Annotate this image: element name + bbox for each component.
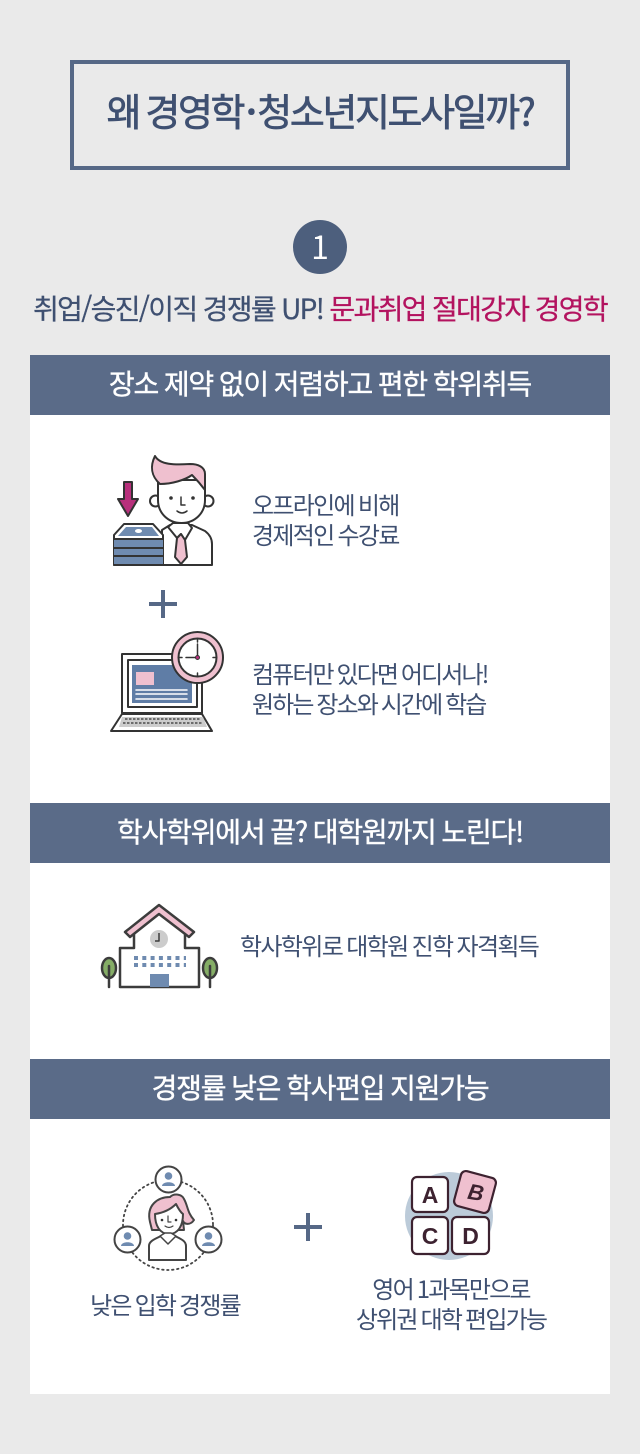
panel: white content: [30, 355, 610, 1394]
icon: ABCD blocks: C: [422, 1223, 438, 1249]
icon: competition circle: [114, 1166, 222, 1270]
text: study anywhere: [252, 655, 487, 720]
number badge: 1: [311, 223, 329, 269]
heading: section 3: 경쟁률 낮은 학사편입 지원가능: [152, 1067, 488, 1107]
text: affordable tuition: [252, 486, 400, 551]
heading: section 2: [30, 803, 610, 863]
heading: section 3: [30, 1059, 610, 1119]
icon: plus 1: [149, 590, 177, 618]
text: affordable tuition: 경제적인 수강료: [252, 516, 399, 551]
text: affordable tuition: 오프라인에 비해: [252, 486, 399, 521]
text: study anywhere: 컴퓨터만 있다면 어디서나!: [252, 655, 487, 690]
icon: laptop with clock: [111, 632, 223, 731]
title box: [70, 60, 570, 170]
number badge: [293, 220, 347, 274]
text: study anywhere: 원하는 장소와 시간에 학습: [252, 685, 485, 720]
text: english only: 상위권 대학 편입가능: [356, 1300, 546, 1335]
text: graduate school: 학사학위로 대학원 진학 자격획득: [240, 927, 538, 962]
heading: section 1: 장소 제약 없이 저렴하고 편한 학위취득: [109, 363, 531, 403]
text: english only: 영어 1과목만으로: [372, 1270, 530, 1305]
text: english only: [356, 1270, 547, 1335]
subtitle: 취업/승진/이직 경쟁률 UP! 문과취업 절대강자 경영학: [33, 288, 607, 328]
icon: plus 2: [294, 1213, 322, 1241]
text: low competition: 낮은 입학 경쟁률: [90, 1286, 240, 1321]
icon: university building: [102, 905, 217, 987]
icon: ABCD blocks: D: [462, 1223, 479, 1249]
icon: ABCD blocks: B: [466, 1179, 486, 1206]
icon: man with money: [114, 456, 214, 565]
title text: 왜 경영학·청소년지도사일까?: [107, 82, 533, 137]
icon: ABCD blocks: A: [422, 1182, 438, 1208]
icon: ABCD blocks: [405, 1170, 497, 1260]
heading: section 1: [30, 355, 610, 415]
heading: section 2: 학사학위에서 끝? 대학원까지 노린다!: [117, 811, 523, 851]
